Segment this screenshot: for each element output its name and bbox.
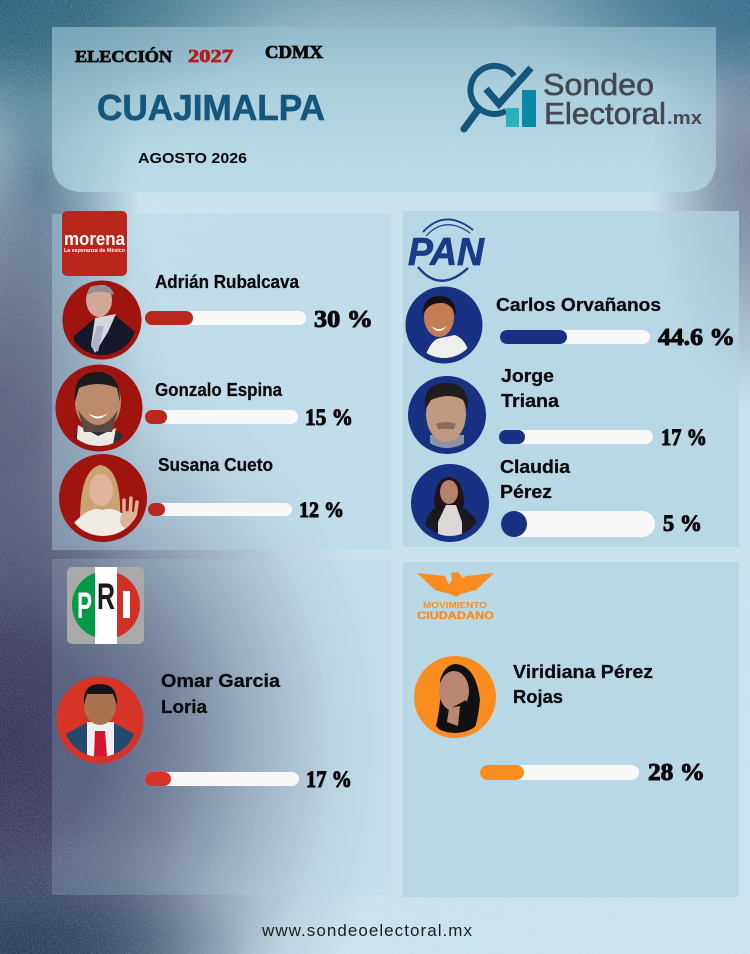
candidate: Carlos Orvañanos <box>406 286 735 364</box>
portrait <box>62 280 142 360</box>
logo: PRI: P <box>77 585 92 626</box>
name: Loria <box>161 697 208 717</box>
name: Triana <box>501 391 560 411</box>
candidate: Viridiana Pérez Rojas <box>414 656 705 786</box>
value: 44.6 % <box>658 325 735 351</box>
candidate: Susana Cueto <box>59 454 344 542</box>
logo: Morena: La esperanza de México <box>64 248 126 254</box>
logo: Movimiento Ciudadano: MOVIMIENTO <box>423 600 487 610</box>
logo: PAN <box>408 219 485 281</box>
name: Pérez <box>500 482 552 502</box>
logo: Sondeo Electoral: .mx <box>667 108 702 128</box>
election label <box>75 42 323 66</box>
name: Omar Garcia <box>161 671 281 691</box>
name: Adrián Rubalcava <box>155 272 300 292</box>
bar 15% <box>145 410 298 424</box>
bar 30% <box>145 311 306 325</box>
logo: Morena <box>62 211 127 276</box>
bar 44.6% <box>500 330 650 344</box>
logo: PAN: PAN <box>408 231 485 274</box>
panel: PAN <box>403 211 739 547</box>
name: Susana Cueto <box>158 455 273 475</box>
panel: Morena <box>52 211 391 550</box>
footer website: www.sondeoelectoral.mx <box>261 921 472 940</box>
portrait <box>414 656 496 738</box>
election label: 2027 <box>188 46 233 66</box>
name: Jorge <box>501 366 554 386</box>
portrait <box>406 286 482 364</box>
title: CUAJIMALPA <box>97 87 325 128</box>
name: Viridiana Pérez <box>513 662 653 682</box>
name <box>500 457 571 502</box>
election label: ELECCIÓN <box>75 47 173 66</box>
panel: PRI <box>52 559 350 895</box>
portrait <box>56 676 144 764</box>
bar 28% <box>480 765 639 780</box>
bar 17% <box>499 430 653 444</box>
name: Rojas <box>513 687 563 707</box>
value: 28 % <box>648 760 705 786</box>
portrait <box>408 376 486 454</box>
bar 12% <box>148 503 292 516</box>
bar 5% <box>501 511 655 537</box>
name <box>501 366 560 411</box>
logo: Sondeo Electoral <box>464 66 702 131</box>
name <box>513 662 653 707</box>
portrait <box>411 464 489 542</box>
logo: Sondeo Electoral: Electoral <box>544 96 666 131</box>
value: 17 % <box>661 425 707 450</box>
candidate: Claudia Pérez <box>411 457 702 542</box>
date: AGOSTO 2026 <box>138 150 247 167</box>
portrait <box>56 364 142 452</box>
value: 5 % <box>663 511 702 536</box>
value: 12 % <box>299 497 344 522</box>
candidate: Gonzalo Espina <box>56 364 353 452</box>
name: Claudia <box>500 457 571 477</box>
election label: CDMX <box>265 42 323 62</box>
candidate: Omar Garcia Loria <box>56 671 352 792</box>
name: Carlos Orvañanos <box>496 295 661 315</box>
candidate: Jorge Triana <box>408 366 707 454</box>
logo: PRI <box>67 567 144 644</box>
panel: Movimiento Ciudadano <box>403 562 739 897</box>
logo: Morena: morena <box>64 229 126 249</box>
logo: Movimiento Ciudadano <box>417 572 494 622</box>
logo: PRI: R <box>97 576 115 617</box>
name: Gonzalo Espina <box>155 380 283 400</box>
value: 15 % <box>305 405 353 430</box>
logo: Sondeo Electoral: Sondeo <box>543 67 654 102</box>
value: 17 % <box>306 767 352 792</box>
candidate: Adrián Rubalcava <box>62 272 373 360</box>
portrait <box>59 454 147 542</box>
name <box>161 671 281 717</box>
logo: Movimiento Ciudadano: CIUDADANO <box>417 610 494 622</box>
bar 17% <box>145 772 299 786</box>
value: 30 % <box>314 307 373 333</box>
panel: header <box>52 27 716 192</box>
